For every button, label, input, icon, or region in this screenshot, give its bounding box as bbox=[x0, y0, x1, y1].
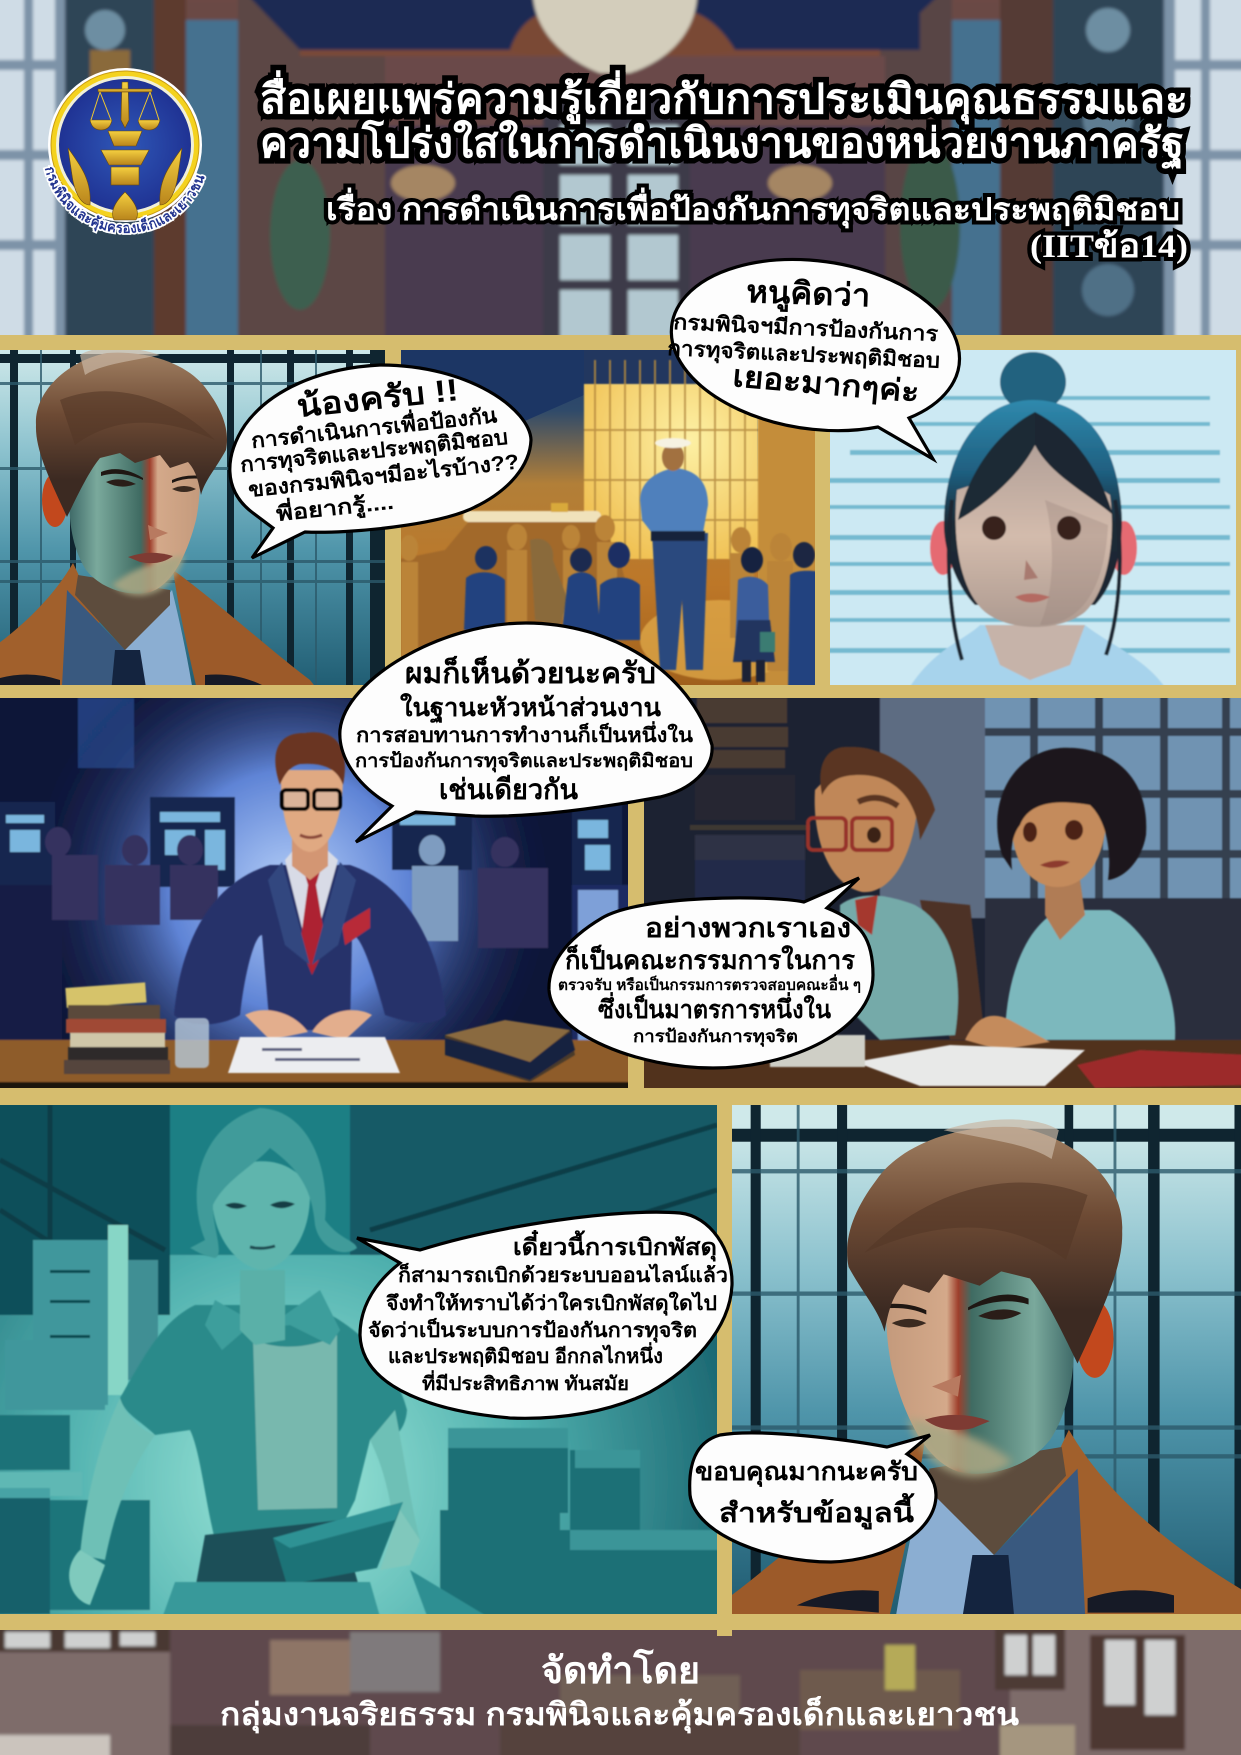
speech bubble: warehouse woman: จึงทำให้ทราบได้ว่าใครเบิกพัสดุใดไป bbox=[386, 1291, 717, 1316]
speech bubble: head of department: เช่นเดียวกัน bbox=[439, 774, 578, 805]
speech bubble: warehouse woman: ที่มีประสิทธิภาพ ทันสมัย bbox=[422, 1370, 629, 1395]
speech bubble: boy asks: น้องครับ !! bbox=[295, 372, 460, 424]
speech bubble: committee colleague bbox=[549, 878, 873, 1068]
title bbox=[260, 70, 1188, 265]
panel: head of department at desk bbox=[0, 688, 638, 1098]
gold notch under right column bbox=[717, 1630, 732, 1636]
speech bubble: warehouse woman: และประพฤติมิชอบ อีกกลไกหนึ่ง bbox=[388, 1341, 663, 1368]
speech bubble: warehouse woman: จัดว่าเป็นระบบการป้องกันการทุจริต bbox=[368, 1317, 697, 1343]
speech bubble: committee colleague: ซึ่งเป็นมาตรการหนึ่งใน bbox=[598, 992, 831, 1024]
title line 2: ความโปร่งใสในการดำเนินงานของหน่วยงานภาครัฐ bbox=[260, 119, 1184, 170]
subtitle code: (IITข้อ14) bbox=[1030, 229, 1188, 265]
speech bubble: head of department: ในฐานะหัวหน้าส่วนงาน bbox=[400, 692, 661, 724]
panel: two committee colleagues bbox=[634, 688, 1241, 1098]
speech bubble: committee colleague: อย่างพวกเราเอง bbox=[645, 913, 851, 943]
logo circular name: กรมพินิจและคุ้มครองเด็กและเยาวชน bbox=[42, 165, 206, 235]
speech bubble: head of department: ผมก็เห็นด้วยนะครับ bbox=[405, 655, 656, 690]
woman writing bbox=[965, 748, 1175, 1050]
logo bbox=[42, 68, 206, 235]
speech bubble: boy thanks: ขอบคุณมากนะครับ bbox=[695, 1458, 918, 1488]
speech bubble: head of department: การป้องกันการทุจริตและประพฤติมิชอบ bbox=[355, 750, 693, 773]
speech bubble: committee colleague: ตรวจรับ หรือเป็นกรรมการตรวจสอบคณะอื่น ๆ bbox=[558, 974, 861, 994]
speech bubble: warehouse woman: เดี๋ยวนี้การเบิกพัสดุ bbox=[513, 1229, 717, 1262]
panel: boy thanking bbox=[732, 1105, 1241, 1614]
speech bubble: head of department: การสอบทานการทำงานก็เป็นหนึ่งใน bbox=[356, 720, 693, 747]
speech bubble: girl replies: กรมพินิจฯมีการป้องกันการ bbox=[673, 310, 939, 346]
speech bubble: girl replies bbox=[667, 259, 959, 459]
panel: woman in warehouse bbox=[0, 1095, 727, 1624]
speech bubble: warehouse woman: ก็สามารถเบิกด้วยระบบออนไลน์แล้ว bbox=[398, 1262, 728, 1287]
panel: boy asking bbox=[0, 350, 385, 685]
man in suit bbox=[174, 732, 446, 1040]
speech bubble: committee colleague: ก็เป็นคณะกรรมการในการ bbox=[565, 944, 855, 975]
footer credit: กลุ่มงานจริยธรรม กรมพินิจและคุ้มครองเด็กและเยาวชน bbox=[220, 1695, 1019, 1734]
panel: police officer and children bbox=[395, 350, 820, 690]
woman figure bbox=[69, 1108, 500, 1624]
speech bubble: boy thanks: สำหรับข้อมูลนี้ bbox=[719, 1492, 915, 1530]
panel: header palace hall background bbox=[0, 0, 1241, 350]
speech bubble: girl replies: เยอะมากๆค่ะ bbox=[731, 360, 921, 409]
speech bubble: head of department bbox=[340, 623, 712, 842]
desk papers and book bbox=[770, 1035, 1241, 1088]
panel: footer room background bbox=[0, 1620, 1241, 1755]
footer credit: จัดทำโดย bbox=[541, 1648, 700, 1691]
speech bubble: girl replies: การทุจริตและประพฤติมิชอบ bbox=[667, 337, 941, 375]
speech bubble: boy asks: ของกรมพินิจฯมีอะไรบ้าง?? bbox=[247, 449, 520, 502]
subtitle: เรื่อง การดำเนินการเพื่อป้องกันการทุจริตและประพฤติมิชอบ bbox=[326, 187, 1180, 229]
speech bubble: warehouse woman bbox=[357, 1212, 732, 1418]
speech bubble: boy asks: การดำเนินการเพื่อป้องกัน bbox=[250, 399, 499, 453]
books and papers on desk bbox=[64, 982, 575, 1082]
police officer bbox=[640, 438, 708, 670]
children group bbox=[464, 542, 820, 690]
footer credit bbox=[220, 1648, 1019, 1734]
speech bubble: committee colleague: การป้องกันการทุจริต bbox=[633, 1027, 798, 1047]
speech bubble: boy thanks bbox=[690, 1433, 936, 1562]
man with glasses bbox=[808, 747, 985, 1040]
title line 1: สื่อเผยแพร่ความรู้เกี่ยวกับการประเมินคุณธรรมและ bbox=[260, 70, 1188, 125]
speech bubble: girl replies: หนูคิดว่า bbox=[746, 274, 871, 315]
panel: girl at blinds bbox=[820, 340, 1241, 695]
speech bubble: boy asks: พี่อยากรู้.... bbox=[275, 486, 395, 528]
speech bubble: boy asks bbox=[230, 365, 531, 558]
speech bubble: boy asks: การทุจริตและประพฤติมิชอบ bbox=[239, 426, 509, 479]
